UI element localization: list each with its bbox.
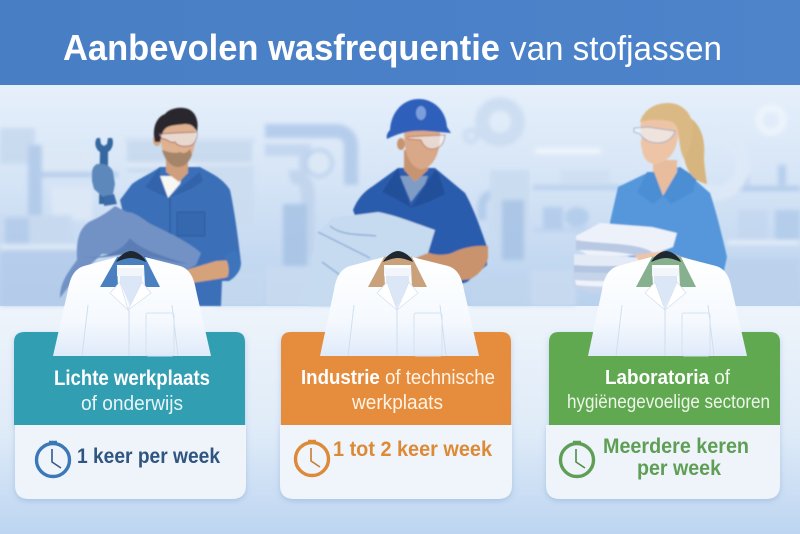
background: pipes and gears [265, 104, 530, 306]
title: Aanbevolen wasfrequentie [63, 27, 500, 68]
frequency 3: Meerdere keren [603, 435, 749, 458]
ear and face [153, 134, 161, 146]
hair [154, 108, 198, 142]
face [640, 112, 679, 164]
raised arm with glove and wrench [92, 138, 117, 206]
card 1 heading: Lichte werkplaats [54, 367, 210, 390]
icon: clock green [560, 442, 594, 476]
page background [0, 306, 800, 534]
ponytail [683, 116, 707, 184]
card 1 subheading: of onderwijs [81, 393, 183, 415]
hanger [651, 251, 681, 262]
lab coat: blue collar [53, 251, 211, 356]
collar [145, 167, 203, 198]
panel: scene light workshop [0, 85, 264, 306]
neck [166, 155, 188, 182]
bundled jacket [298, 212, 435, 307]
lab coat: green collar [588, 251, 747, 356]
collar [382, 168, 445, 208]
hair [640, 103, 693, 159]
title suffix: van stofjassen [510, 30, 722, 68]
hanger [116, 251, 146, 262]
icon: clock orange [296, 441, 328, 476]
frequency 2: 1 tot 2 keer week [333, 438, 492, 461]
card 2 heading: Industrie of technische [301, 367, 495, 389]
neck [404, 150, 428, 182]
forearm [186, 260, 234, 283]
neck and chest [653, 160, 677, 196]
panel: card orange [280, 332, 512, 499]
card 3 heading: Laboratoria of [605, 367, 730, 389]
lab coat: tan collar [320, 251, 479, 356]
hanger [383, 251, 413, 262]
safety glasses [159, 132, 197, 146]
t-shirt [160, 176, 182, 198]
panel: scene laboratory [530, 85, 800, 306]
background: lab shelves [530, 108, 800, 306]
stack of folded jackets [573, 223, 677, 293]
hard hat [387, 99, 451, 139]
card 2 subheading: werkplaats [351, 392, 443, 414]
shirt [400, 176, 428, 202]
panel: card teal [14, 332, 246, 499]
panel: scene industry [264, 85, 530, 307]
torso [120, 167, 241, 306]
person: lab worker [573, 103, 727, 293]
torso [353, 168, 487, 306]
frequency 3 second line: per week [637, 457, 721, 480]
crumpled jacket [60, 206, 201, 298]
collar [637, 167, 697, 204]
panel: card green [546, 332, 780, 499]
torso [610, 167, 727, 275]
header band [0, 0, 800, 85]
forearms [634, 251, 712, 271]
ear and face [397, 138, 405, 150]
beard [162, 149, 192, 167]
frequency 1: 1 keer per week [77, 445, 220, 468]
background: workshop shelves [0, 128, 264, 306]
card 3 subheading: hygiënegevoelige sectoren [567, 392, 770, 413]
safety glasses [408, 135, 445, 149]
person: mechanic [60, 108, 241, 306]
safety glasses [634, 127, 675, 143]
forearm [402, 243, 488, 280]
person: industrial worker [298, 99, 488, 307]
icon: clock blue [36, 442, 70, 476]
